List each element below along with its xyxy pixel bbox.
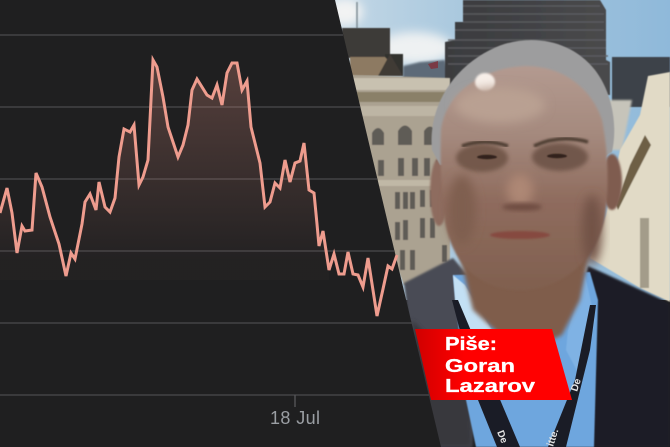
author text: Lazarov	[445, 375, 536, 396]
rooftop behind head	[604, 100, 632, 150]
x-axis tick	[294, 395, 296, 407]
eyes	[477, 155, 497, 159]
ears	[430, 158, 448, 226]
cloud	[377, 32, 453, 64]
jowl shadow	[582, 195, 602, 265]
author tag	[415, 329, 572, 400]
author text: Goran	[445, 355, 515, 376]
right building	[612, 57, 670, 107]
chart panel background	[0, 0, 441, 447]
jacket	[404, 258, 670, 447]
author text	[445, 333, 536, 396]
shirt collar	[453, 275, 492, 345]
mountains	[403, 60, 450, 80]
x-axis label: 18 Jul	[270, 408, 320, 428]
head: hair, face, features	[430, 40, 622, 290]
mouth	[490, 231, 550, 239]
nose	[507, 174, 533, 206]
eye sockets	[456, 144, 508, 172]
tag background	[415, 329, 572, 400]
antenna rooftop building	[342, 2, 403, 76]
lanyard	[452, 300, 596, 447]
hair	[432, 40, 614, 165]
brows	[462, 142, 508, 146]
sky	[330, 0, 670, 300]
photo: rooftop portrait	[327, 0, 670, 447]
face	[441, 66, 608, 290]
area fill under line	[0, 60, 329, 280]
old cream building	[350, 75, 452, 285]
shirt	[453, 272, 598, 447]
author text: Piše:	[445, 333, 497, 354]
lanyard: De	[569, 377, 584, 393]
neck	[458, 250, 590, 350]
price line	[0, 60, 397, 316]
forehead highlight	[475, 73, 495, 91]
right white wall	[590, 72, 670, 302]
office tower	[445, 0, 610, 95]
flag	[428, 61, 438, 69]
lanyard: De	[494, 429, 509, 445]
cheek shadow left	[448, 175, 476, 245]
chart gridlines	[0, 35, 429, 395]
